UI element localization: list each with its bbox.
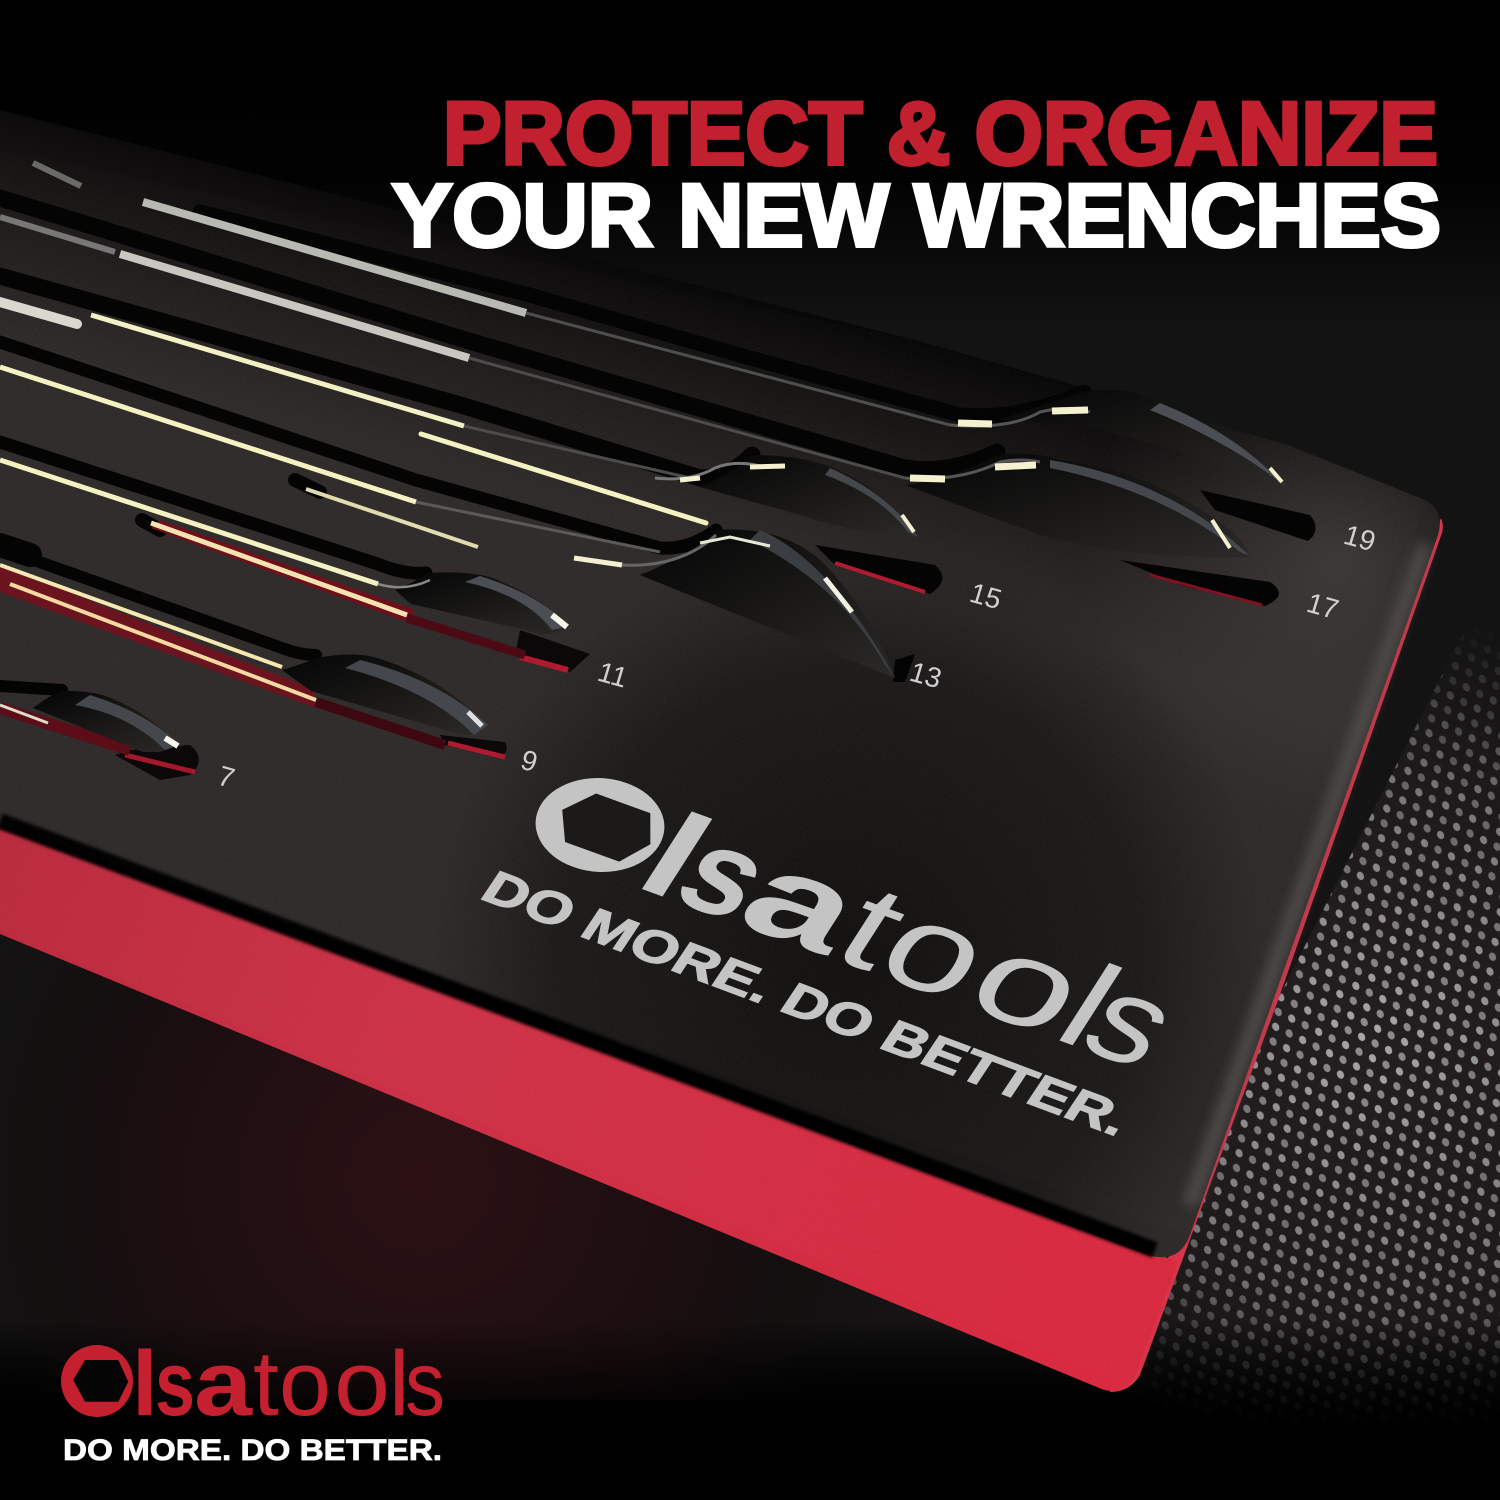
logo letters tools: [253, 1333, 445, 1435]
slot 9 end: [440, 735, 507, 757]
size 13: 13: [906, 656, 945, 694]
printed letters tools: l: [1035, 940, 1145, 1072]
logo letters tools: o: [279, 1333, 331, 1435]
logo letters lsa: [132, 1333, 253, 1435]
red foam speckle: [0, 830, 1170, 1385]
slot 17 end: [1120, 560, 1279, 606]
brand logo bottom left: [61, 1333, 445, 1467]
slot 11 end: [515, 630, 590, 672]
wrench 9: [0, 565, 488, 735]
slot 13 notch: [893, 654, 915, 682]
tray red side right: [1100, 518, 1443, 1392]
logo letters lsa: l: [132, 1333, 158, 1435]
size 11: 11: [594, 656, 631, 694]
wrench 7: [0, 691, 180, 752]
size 7: 7: [214, 760, 238, 794]
logo letters tools: t: [253, 1333, 279, 1435]
title line 2: YOUR NEW WRENCHES: [392, 165, 1441, 265]
size numbers printed on tray: [214, 519, 1379, 794]
tray red front side: [0, 822, 1178, 1391]
size 15: 15: [966, 577, 1005, 615]
printed letters tools: s: [1061, 950, 1202, 1093]
slot 11 red floor: [151, 520, 415, 622]
logo letters tools: s: [405, 1333, 445, 1435]
red slot floors and slot ends: [0, 490, 1316, 780]
wrench 15: [0, 302, 918, 537]
logo tagline: DO MORE. DO BETTER.: [63, 1434, 442, 1467]
title line 1: PROTECT & ORGANIZE: [443, 83, 1438, 183]
printed letters tools: [814, 860, 1202, 1093]
wrench 11: [0, 460, 569, 634]
title: [392, 83, 1441, 265]
logo letters tools: o: [334, 1333, 390, 1435]
wrench 19: [33, 163, 1288, 490]
logo letter O with hexagon: O: [61, 1333, 133, 1435]
printed wordmark: [501, 747, 1202, 1093]
wrenches: [0, 163, 1288, 752]
printed letters tools: o: [856, 875, 1017, 1026]
slot 19 end: [1200, 490, 1316, 541]
size 19: 19: [1340, 519, 1379, 557]
printed letters tools: t: [814, 860, 933, 995]
printed logo on tray: [472, 747, 1202, 1145]
slot 15 end: [815, 545, 942, 594]
slot 7 red floor: [0, 708, 130, 750]
printed letters lsa: a: [718, 825, 891, 980]
printed tagline: DO MORE. DO BETTER.: [472, 861, 1142, 1145]
printed letters lsa: [617, 789, 891, 980]
printed letters tools: o: [945, 908, 1113, 1061]
tray lit corner: [0, 110, 1440, 1257]
tray top face: [0, 110, 1440, 1257]
tray dark logo area: [0, 110, 1440, 1257]
foam speckle: [0, 150, 1425, 1235]
logo letters tools: l: [389, 1333, 409, 1435]
size 9: 9: [517, 744, 541, 778]
printed letter O with hexagon: O: [501, 747, 694, 909]
printed letters lsa: s: [654, 802, 796, 945]
wrench slots: [0, 198, 1084, 690]
logo letters lsa: a: [194, 1333, 253, 1435]
logo letters lsa: s: [155, 1333, 195, 1435]
background textured mat: [0, 231, 1500, 1410]
printed letters lsa: l: [617, 789, 735, 923]
wrench 13: [0, 367, 895, 678]
tray right edge sheen: [1190, 545, 1425, 1205]
slot 9 red floor: [0, 565, 316, 708]
size 17: 17: [1303, 587, 1342, 625]
wrench 17: [0, 217, 1250, 557]
tray front black rim: [0, 821, 1155, 1250]
slot 7 end: [115, 745, 199, 780]
